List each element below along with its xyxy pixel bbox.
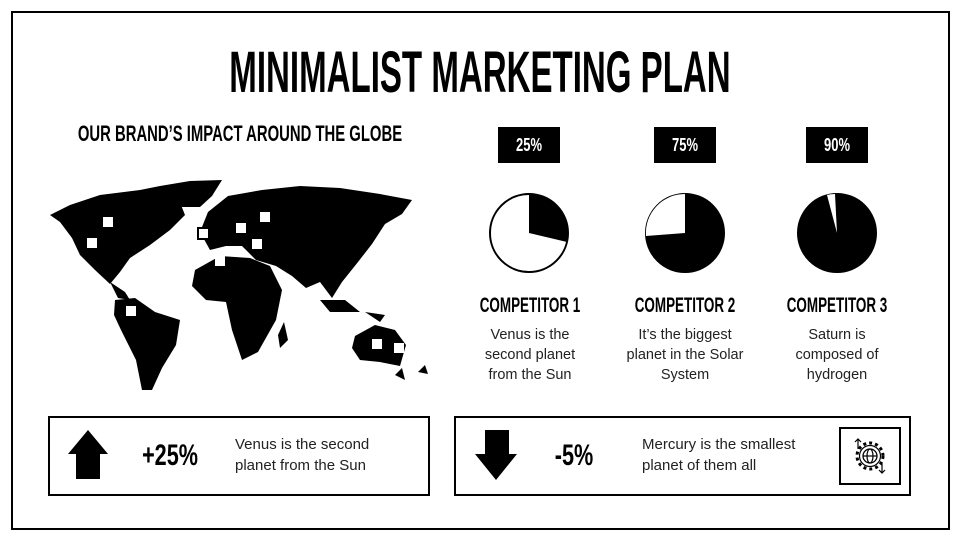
subtitle: map heading: OUR BRAND’S IMPACT AROUND THE GLOBE <box>78 121 402 146</box>
pie chart: competitor 2 <box>627 127 744 383</box>
pie chart: competitor 3 <box>787 127 887 383</box>
map markers <box>87 212 404 353</box>
pie chart: competitor 1: Venus is the second planet from the Sun <box>485 327 575 383</box>
panel: increase <box>48 416 430 496</box>
text: planet of them all <box>642 457 756 474</box>
text: Mercury is the smallest <box>642 436 795 453</box>
pie chart: competitor 3: COMPETITOR 3 <box>787 294 887 317</box>
pie chart: competitor 1: COMPETITOR 1 <box>480 294 580 317</box>
pie chart: competitor 2: 75% <box>672 134 698 154</box>
icon: up arrow <box>68 430 108 479</box>
pie chart: competitor 3: Saturn is composed of hydrogen <box>795 327 879 383</box>
tag 25% <box>498 127 560 163</box>
text <box>642 436 796 474</box>
icon: down arrow <box>475 430 517 480</box>
text: Venus is the second <box>235 436 369 453</box>
panel: decrease <box>454 416 911 496</box>
stat +25%: +25% <box>142 439 198 472</box>
pie chart: competitor 3: 90% <box>824 134 850 154</box>
stat -5%: -5% <box>555 439 593 472</box>
tag 25%: 25% <box>516 134 542 154</box>
text: planet from the Sun <box>235 457 366 474</box>
title: MINIMALIST MARKETING PLAN <box>229 40 731 105</box>
text <box>235 436 369 474</box>
pie chart: competitor 2: It’s the biggest planet in the Solar System <box>627 327 743 383</box>
icon: globe gear <box>839 427 901 485</box>
pie chart: competitor 1 <box>480 127 580 383</box>
pie chart: competitor 2: COMPETITOR 2 <box>635 294 735 317</box>
